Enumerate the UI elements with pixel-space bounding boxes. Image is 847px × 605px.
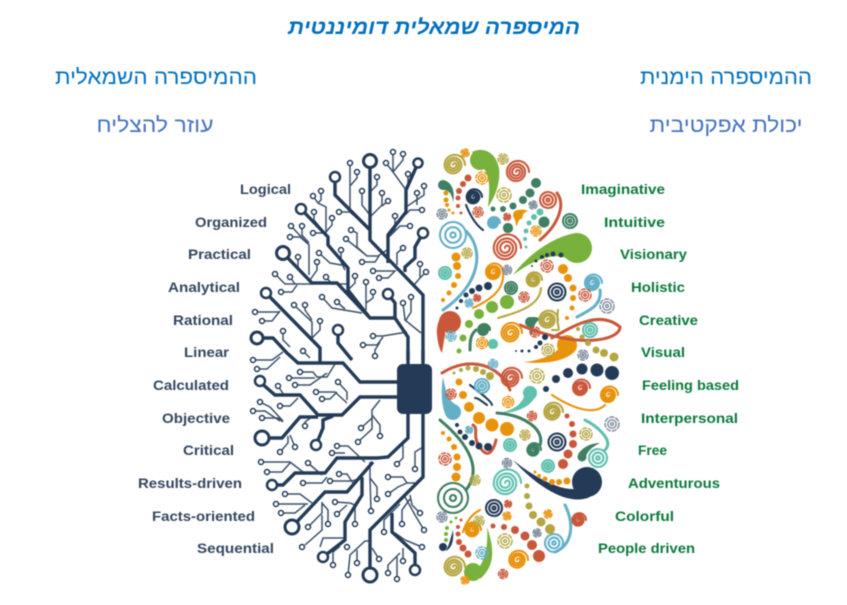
- left labels: logical traits: Facts-oriented: [152, 508, 255, 524]
- line spirals with tails: [438, 155, 620, 575]
- small node terminals: [250, 150, 428, 582]
- thick circuit traces: [257, 161, 423, 573]
- subheading: left: עוזר להצליח: [96, 114, 214, 137]
- right labels: creative traits: Colorful: [615, 508, 674, 524]
- title: המיספרה שמאלית דומיננטית: [287, 16, 580, 39]
- left labels: logical traits: Linear: [184, 344, 230, 360]
- right labels: creative traits: Adventurous: [628, 475, 720, 491]
- right labels: creative traits: Interpersonal: [641, 410, 738, 426]
- heading: right hemisphere: ההמיספרה הימנית: [640, 66, 812, 89]
- left labels: logical traits: Rational: [173, 312, 233, 328]
- right labels: creative traits: Visual: [641, 344, 685, 360]
- subheading: right: יכולת אפקטיבית: [650, 114, 802, 137]
- right labels: creative traits: Holistic: [631, 279, 685, 295]
- right labels: creative traits: People driven: [598, 540, 695, 556]
- left labels: logical traits: Critical: [183, 442, 234, 458]
- left labels: logical traits: [138, 181, 291, 556]
- left labels: logical traits: Results-driven: [138, 475, 242, 491]
- left brain: circuit tree: [250, 150, 432, 582]
- left labels: logical traits: Practical: [188, 246, 251, 262]
- right labels: creative traits: Imaginative: [581, 181, 665, 197]
- left labels: logical traits: Sequential: [197, 540, 274, 556]
- thin circuit traces: [253, 152, 426, 579]
- heading: left hemisphere: ההמיספרה השמאלית: [55, 66, 257, 89]
- right labels: creative traits: Feeling based: [642, 377, 739, 393]
- small rosettes: [437, 149, 619, 584]
- dot chains: [441, 174, 619, 562]
- right labels: creative traits: [581, 181, 739, 556]
- right labels: creative traits: Intuitive: [604, 214, 665, 230]
- filled comma swirls: [437, 150, 602, 581]
- right labels: creative traits: Visionary: [620, 246, 687, 262]
- left labels: logical traits: Objective: [162, 410, 230, 426]
- right brain: colourful swirls: [437, 149, 620, 584]
- central processor chip: [397, 350, 432, 414]
- left labels: logical traits: Organized: [195, 214, 267, 230]
- right labels: creative traits: Free: [638, 442, 667, 458]
- left labels: logical traits: Calculated: [153, 377, 229, 393]
- right labels: creative traits: Creative: [639, 312, 698, 328]
- large ring terminals: [251, 154, 428, 582]
- left labels: logical traits: Analytical: [168, 279, 240, 295]
- left labels: logical traits: Logical: [240, 181, 291, 197]
